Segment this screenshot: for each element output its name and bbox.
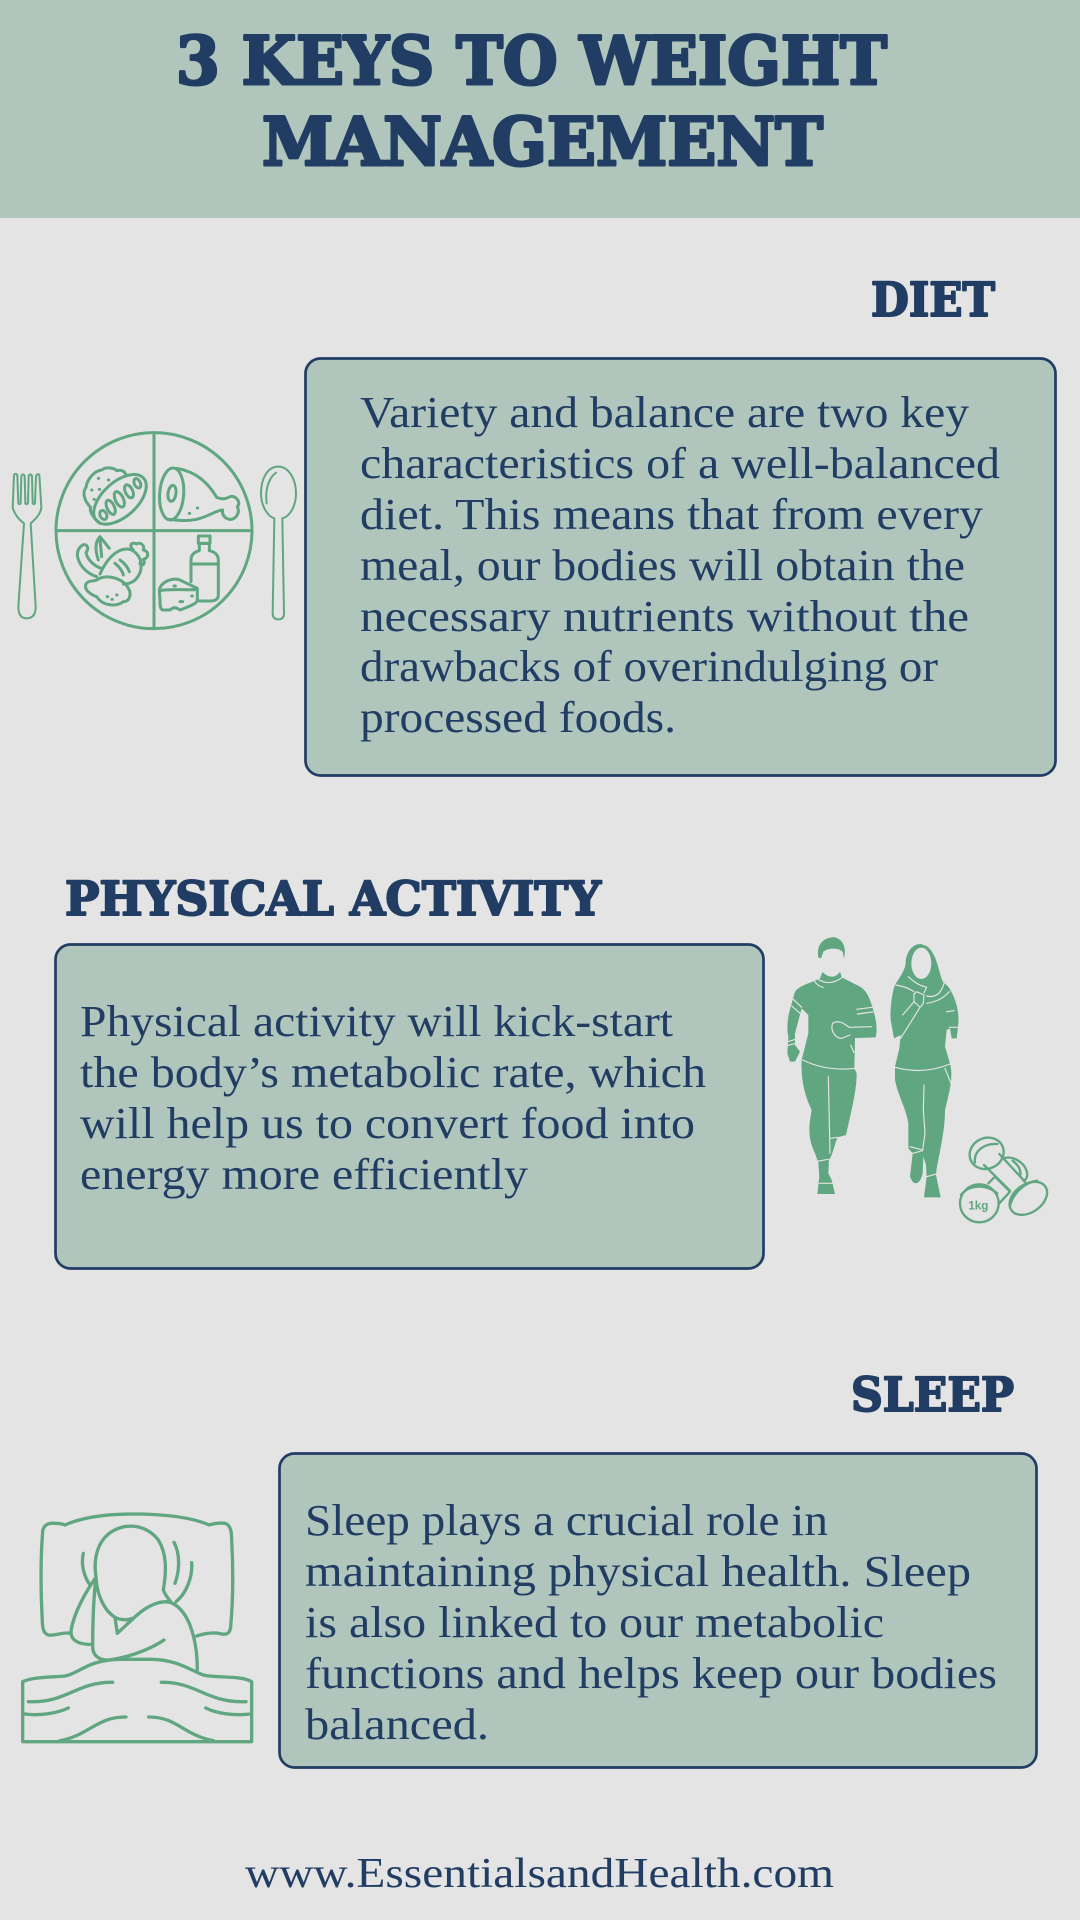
diet body text: necessary nutrients without the	[360, 591, 969, 641]
diet body text: diet. This means that from every	[360, 489, 984, 539]
icon: sleeper	[71, 1526, 197, 1669]
diet body text: characteristics of a well-balanced	[360, 438, 1000, 488]
footer url: www.EssentialsandHealth.com	[245, 1851, 834, 1897]
diet body text	[360, 387, 1000, 742]
physical activity body text	[80, 996, 706, 1199]
icon: sleeping person in bed	[23, 1514, 252, 1742]
icon: dumbbells	[960, 1132, 1053, 1222]
sleep body text: Sleep plays a crucial role in	[305, 1495, 828, 1545]
diet body text: drawbacks of overindulging or	[360, 641, 938, 691]
title	[176, 22, 887, 181]
panel: physical activity	[56, 944, 764, 1268]
icon: bread and salad	[84, 465, 155, 533]
icon: dumbbells: 1kg	[968, 1199, 988, 1212]
physical activity body text: energy more efficiently	[80, 1149, 529, 1199]
physical activity body text: Physical activity will kick-start	[80, 996, 674, 1046]
sleep body text	[305, 1495, 997, 1749]
icon: fork	[13, 474, 41, 618]
icon: plate	[56, 433, 252, 629]
physical activity body text: will help us to convert food into	[80, 1098, 695, 1148]
icon: pillow	[41, 1514, 233, 1636]
icon: female runner	[891, 944, 958, 1197]
icon: male runner	[787, 937, 877, 1194]
heading: diet: DIET	[871, 273, 995, 328]
header banner	[0, 0, 1080, 218]
diet body text: Variety and balance are two key	[360, 387, 970, 437]
title: 3 KEYS TO WEIGHT	[176, 22, 887, 100]
icon: bottle and cheese	[159, 536, 218, 610]
heading: sleep: SLEEP	[851, 1368, 1014, 1423]
diet body text: meal, our bodies will obtain the	[360, 540, 965, 590]
heading: physical activity: PHYSICAL ACTIVITY	[65, 872, 601, 927]
icon: plate with cutlery	[13, 433, 296, 629]
icon: blanket	[23, 1659, 252, 1742]
physical activity body text: the body’s metabolic rate, which	[80, 1047, 706, 1097]
icon: vegetables	[77, 537, 148, 605]
sleep body text: maintaining physical health. Sleep	[305, 1546, 971, 1596]
sleep body text: functions and helps keep our bodies	[305, 1648, 997, 1698]
icon: runners and dumbbells	[787, 937, 1053, 1222]
panel: diet	[306, 358, 1056, 776]
title: MANAGEMENT	[262, 103, 823, 181]
icon: spoon	[261, 467, 296, 619]
sleep body text: is also linked to our metabolic	[305, 1597, 884, 1647]
panel: sleep	[280, 1454, 1036, 1768]
diet body text: processed foods.	[360, 692, 676, 742]
icon: ham	[158, 467, 239, 521]
sleep body text: balanced.	[305, 1699, 489, 1749]
